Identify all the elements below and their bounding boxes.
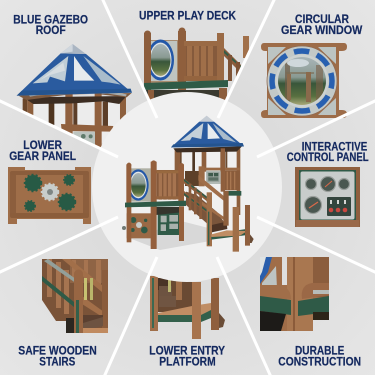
panel: blue gazebo roof	[13, 13, 132, 150]
heading: blue gazebo roof: BLUE GAZEBO	[13, 13, 88, 26]
heading: lower entry platform	[149, 344, 225, 368]
heading: circular gear window: CIRCULAR	[295, 13, 350, 26]
illustration: control panel	[295, 167, 360, 227]
heading: durable construction	[278, 344, 361, 368]
illustration: gear window frame	[261, 43, 347, 118]
heading: safe wooden stairs	[18, 344, 97, 368]
heading: blue gazebo roof	[13, 13, 88, 37]
panel: durable construction	[260, 257, 361, 368]
heading: safe wooden stairs: SAFE WOODEN	[18, 344, 97, 357]
heading: lower entry platform: LOWER ENTRY	[149, 344, 225, 357]
heading: lower entry platform: PLATFORM	[159, 355, 216, 368]
ground shadow	[130, 222, 210, 250]
heading: circular gear window	[281, 13, 362, 37]
panel: interactive control panel	[287, 140, 369, 227]
illustration: construction joint	[260, 257, 329, 331]
illustration: gazebo roof	[17, 44, 132, 150]
heading: durable construction: DURABLE	[295, 344, 345, 357]
right tower posts	[175, 148, 240, 215]
panel: circular gear window	[261, 13, 362, 118]
left deck railing	[157, 170, 180, 199]
heading: lower gear panel	[9, 139, 76, 163]
central play set illustration	[122, 116, 254, 252]
lower green panel and gear panel	[158, 212, 181, 235]
illustration: entry platform	[150, 276, 225, 339]
heading: upper play deck: UPPER PLAY DECK	[139, 10, 237, 22]
panel: lower entry platform	[149, 276, 225, 368]
window reflection	[285, 59, 323, 105]
entry platform	[211, 229, 247, 240]
illustration: stairs	[42, 259, 108, 333]
heading: interactive control panel	[287, 140, 369, 164]
deck posts	[126, 162, 184, 249]
heading: circular gear window: GEAR WINDOW	[281, 24, 362, 37]
heading: lower gear panel: LOWER	[23, 139, 63, 152]
stairs	[186, 192, 227, 229]
window panel	[127, 168, 151, 202]
heading: safe wooden stairs: STAIRS	[39, 355, 76, 368]
illustration: upper play deck	[144, 28, 249, 100]
central circle	[92, 92, 282, 282]
gauges	[304, 176, 350, 214]
panel: lower gear panel	[8, 139, 91, 224]
heading: blue gazebo roof: ROOF	[36, 24, 66, 37]
gears	[25, 175, 75, 211]
heading: lower gear panel: GEAR PANEL	[9, 150, 76, 163]
heading: durable construction: CONSTRUCTION	[278, 355, 361, 368]
upper rail	[185, 171, 200, 186]
button box	[327, 197, 351, 216]
illustration: gear panel	[8, 167, 91, 224]
gazebo roof	[171, 122, 244, 147]
panel: upper play deck	[139, 10, 249, 100]
panel: safe wooden stairs	[18, 259, 108, 368]
